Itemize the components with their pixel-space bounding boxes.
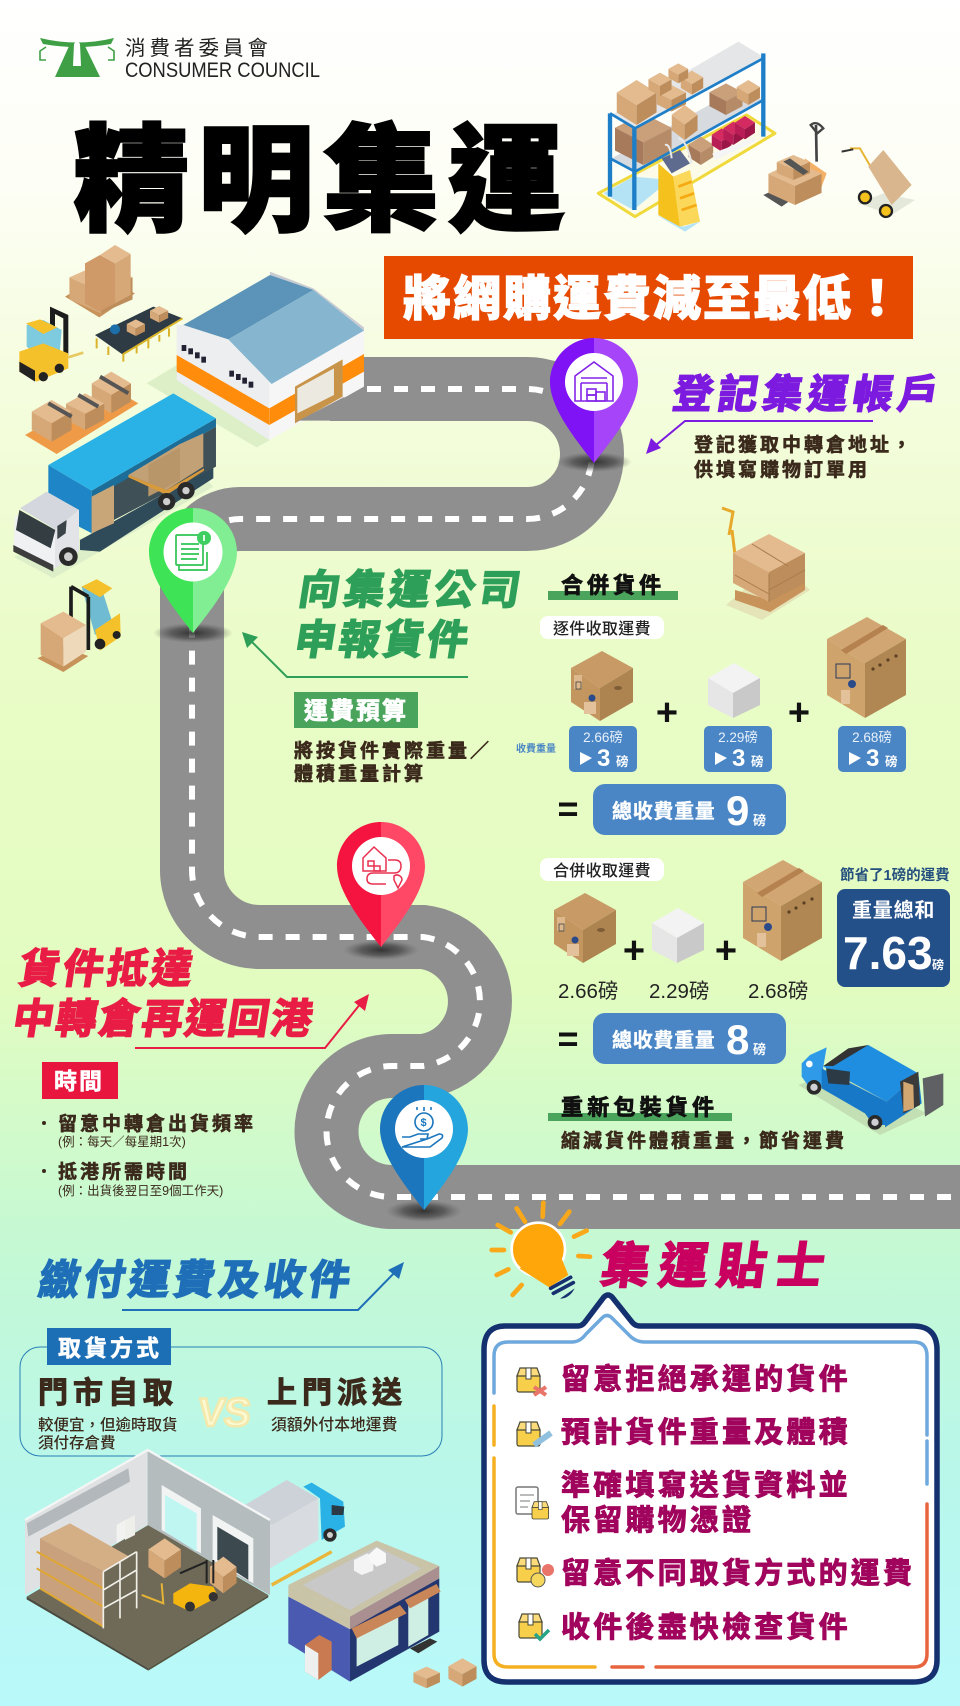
panel: tips xyxy=(484,1295,937,1682)
boxes row 2 xyxy=(554,860,822,972)
weights row 2 xyxy=(558,980,808,1003)
section: repackage goods: 縮減貨件體積重量，節省運費 xyxy=(561,1129,847,1152)
tip 3: 保留購物憑證 xyxy=(561,1504,754,1537)
step 2 text: declare goods: 體積重量計算 xyxy=(294,762,426,785)
boxes row 2: + xyxy=(623,930,645,972)
card: total weight 7.63: 重量總和 xyxy=(852,898,935,922)
arrow: purple xyxy=(646,421,873,454)
illustration: warehouse shelves, ladder and trolleys xyxy=(598,42,915,232)
illustration: warehouse interior and truck xyxy=(25,1450,345,1671)
step 2 text: declare goods: 將按貨件實際重量／ xyxy=(294,739,492,762)
illustration: storefront xyxy=(288,1541,477,1688)
illustration: warehouse building xyxy=(147,272,380,447)
step 3 text: arrive at transit warehouse xyxy=(10,946,369,1048)
step 3 text: arrive at transit warehouse: 中轉倉再運回港 xyxy=(10,996,318,1042)
total 8 lb: 磅 xyxy=(753,1042,766,1057)
tip 3: 準確填寫送貨資料並 xyxy=(561,1469,851,1502)
total 9 lb: 9 xyxy=(726,787,749,834)
time notes xyxy=(42,1112,256,1198)
arrow: green xyxy=(242,632,468,677)
step 2 text: declare goods: 向集運公司 xyxy=(296,567,528,613)
total 9 lb xyxy=(557,784,786,835)
pin 4: blue: $ xyxy=(420,1117,427,1129)
tag: pickup method xyxy=(47,1328,171,1365)
weight cards: 磅 xyxy=(616,754,629,769)
icon: document info xyxy=(176,531,211,570)
road xyxy=(192,389,960,1197)
total 8 lb: 8 xyxy=(726,1016,749,1063)
section: repackage goods xyxy=(548,1095,847,1152)
tag: budget: 運費預算 xyxy=(304,698,408,725)
panel: pickup methods xyxy=(20,1328,442,1456)
weights row 2: 2.29磅 xyxy=(649,980,709,1003)
saving note: 節省了1磅的運費 xyxy=(840,866,950,884)
boxes row 1 xyxy=(571,617,906,734)
step 4 text: pay and collect: 繳付運費及收件 xyxy=(36,1257,358,1303)
icon: hand with coin xyxy=(402,1107,443,1147)
title: 精明集運 xyxy=(73,116,573,246)
tip 2: 預計貨件重量及體積 xyxy=(561,1416,851,1449)
card: total weight 7.63 xyxy=(837,889,950,987)
banner: 將網購運費減至最低！ xyxy=(403,273,903,326)
time notes: 留意中轉倉出貨頻率 xyxy=(58,1112,256,1135)
label: charged weight: 收費重量 xyxy=(516,742,556,755)
illustration: blue van xyxy=(798,1045,943,1135)
time notes: 抵港所需時間 xyxy=(58,1161,190,1183)
icon: light bulb xyxy=(492,1203,590,1299)
section: consolidate goods: 合併貨件 xyxy=(561,573,665,598)
card: total weight 7.63: 磅 xyxy=(932,957,944,972)
logo: Consumer Council xyxy=(40,37,320,82)
weight cards: 3 xyxy=(597,745,610,772)
panel: pickup methods: VS xyxy=(196,1391,252,1435)
panel: pickup methods: 須額外付本地運費 xyxy=(271,1416,397,1434)
tip 3 xyxy=(516,1469,851,1537)
tag: budget xyxy=(294,692,418,728)
pill: charged separately xyxy=(540,616,664,639)
step 2 text: declare goods: 申報貨件 xyxy=(292,617,475,663)
tip 1: 留意拒絕承運的貨件 xyxy=(561,1363,851,1396)
total 9 lb: 總收費重量 xyxy=(612,799,716,823)
tag: pickup method: 取貨方式 xyxy=(58,1335,162,1361)
step 1 text: register account: 登記集運帳戶 xyxy=(670,372,947,417)
step 1 text: register account: 登記獲取中轉倉地址， xyxy=(694,433,914,456)
pin 3: red xyxy=(337,822,425,960)
panel: pickup methods: 較便宜，但逾時取貨 xyxy=(38,1415,178,1434)
panel: pickup methods: 須付存倉費 xyxy=(38,1434,116,1452)
total 8 lb xyxy=(557,1013,786,1064)
tip 5: 收件後盡快檢查貨件 xyxy=(561,1611,851,1644)
total 8 lb: = xyxy=(557,1018,579,1059)
illustration: forklift with pallet xyxy=(37,579,121,672)
total 8 lb: 總收費重量 xyxy=(612,1028,716,1052)
icon: warehouse route xyxy=(363,847,402,888)
panel: pickup methods: 門市自取 xyxy=(38,1377,178,1410)
weight cards: 2.29磅 xyxy=(718,729,758,745)
panel: pickup methods: 上門派送 xyxy=(267,1377,407,1410)
section: repackage goods: 重新包裝貨件 xyxy=(561,1095,718,1120)
weight cards: 3 xyxy=(866,745,879,772)
weight cards: 3 xyxy=(732,745,745,772)
weights row 2: 2.66磅 xyxy=(558,980,618,1003)
boxes row 2: + xyxy=(715,930,737,972)
step 2 text: declare goods xyxy=(242,567,528,785)
step 1 text: register account: 供填寫購物訂單用 xyxy=(694,459,870,481)
logo: Consumer Council: CONSUMER COUNCIL xyxy=(125,59,320,82)
total 9 lb: = xyxy=(557,788,579,829)
time notes: (例：每天／每星期1次) xyxy=(58,1134,186,1149)
card: total weight 7.63: 7.63 xyxy=(843,927,933,979)
weight cards xyxy=(569,726,906,772)
pin 4: blue xyxy=(380,1085,468,1222)
icon: warehouse xyxy=(575,362,613,401)
total 9 lb: 磅 xyxy=(753,813,766,828)
boxes row 1: + xyxy=(788,692,810,734)
weight cards: 磅 xyxy=(885,754,898,769)
weight cards: 2.66磅 xyxy=(583,729,623,745)
illustration: pallet jack with boxes xyxy=(722,508,810,620)
arrow: red xyxy=(135,994,369,1048)
logo: Consumer Council: 消費者委員會 xyxy=(125,37,272,60)
arrow: blue xyxy=(122,1262,404,1310)
illustration: pallets, forklift, conveyor xyxy=(19,245,183,454)
illustration: truck xyxy=(13,393,216,578)
banner xyxy=(384,256,913,339)
step 1 text: register account xyxy=(646,372,947,481)
weight cards: 2.68磅 xyxy=(852,729,892,745)
tag: time: 時間 xyxy=(54,1068,104,1094)
tag: time xyxy=(42,1062,118,1099)
pill: charged combined xyxy=(540,858,664,881)
boxes row 1: + xyxy=(656,692,678,734)
pill: charged combined: 合併收取運費 xyxy=(553,862,651,880)
tip 4: 留意不同取貨方式的運費 xyxy=(561,1557,915,1590)
pin 1: purple xyxy=(550,338,638,472)
time notes: (例：出貨後翌日至9個工作天) xyxy=(58,1184,223,1198)
step 3 text: arrive at transit warehouse: 貨件抵達 xyxy=(16,946,199,992)
weight cards: 磅 xyxy=(751,754,764,769)
weights row 2: 2.68磅 xyxy=(748,980,808,1003)
heading: shipping tips: 集運貼士 xyxy=(597,1239,837,1294)
pill: charged separately: 逐件收取運費 xyxy=(553,620,651,638)
pin 2: green xyxy=(149,508,237,643)
